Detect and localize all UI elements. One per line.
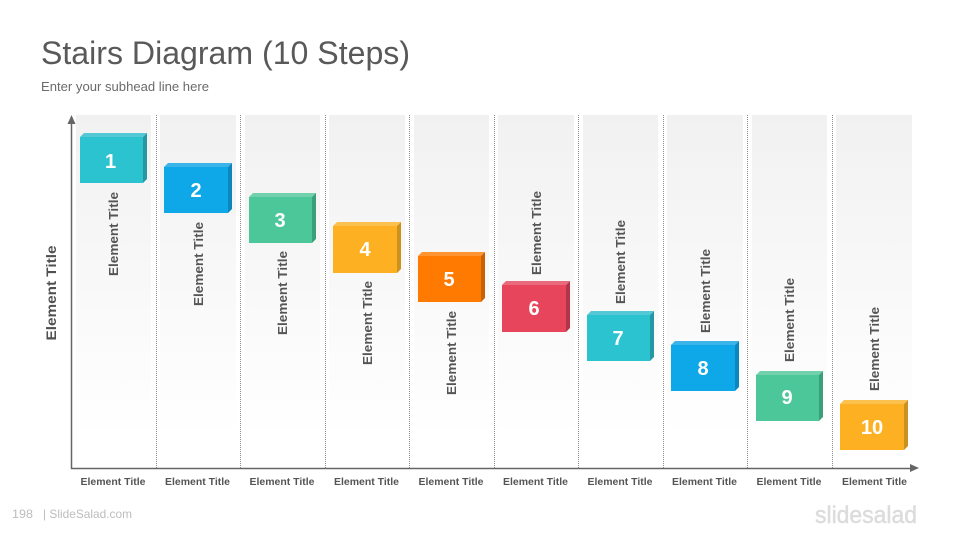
step 2 (164, 163, 232, 213)
step 9: 9 (781, 387, 793, 409)
step 4 vertical label: Element Title (361, 281, 375, 365)
step 7: 7 (612, 328, 624, 350)
step 2: 2 (190, 180, 202, 202)
x axis labels: Element Title (418, 476, 484, 488)
x axis labels: Element Title (842, 476, 907, 488)
column backgrounds (76, 115, 912, 465)
y axis arrow (68, 115, 76, 469)
x axis labels (80, 476, 907, 488)
x axis labels: Element Title (334, 476, 399, 488)
step 9 (756, 371, 823, 421)
step 2 vertical label: Element Title (192, 222, 206, 306)
x axis labels: Element Title (165, 476, 230, 488)
step 1 (80, 133, 147, 183)
logo wordmark: slidesalad (815, 502, 917, 529)
footer page number and site: 198 (12, 507, 33, 521)
step 3: 3 (274, 210, 286, 232)
step 8: 8 (697, 358, 709, 380)
step 10 (840, 400, 908, 450)
step 4 (333, 222, 401, 273)
step 3 (249, 193, 316, 243)
step 10 vertical label: Element Title (868, 307, 882, 391)
step 7 (587, 311, 654, 361)
subhead: Enter your subhead line here (41, 80, 209, 94)
step 5: 5 (443, 269, 455, 291)
step 5 vertical label: Element Title (445, 311, 459, 395)
title: Stairs Diagram (10 Steps) (41, 35, 410, 71)
step 9 vertical label: Element Title (783, 278, 797, 362)
step 7 vertical label: Element Title (614, 220, 628, 304)
step 4: 4 (359, 239, 371, 261)
step 5 (418, 252, 485, 302)
x axis labels: Element Title (250, 476, 315, 488)
step 8 (671, 341, 739, 391)
x axis labels: Element Title (588, 476, 653, 488)
x axis labels: Element Title (756, 476, 822, 488)
step 6: 6 (528, 298, 540, 320)
step 1: 1 (105, 151, 116, 173)
step 8 vertical label: Element Title (699, 249, 713, 333)
x axis arrow (71, 464, 919, 472)
step 10: 10 (861, 417, 883, 439)
x axis labels: Element Title (672, 476, 737, 488)
x axis labels: Element Title (503, 476, 568, 488)
step 1 vertical label: Element Title (107, 192, 121, 276)
footer page number and site: | SlideSalad.com (43, 507, 132, 521)
step 3 vertical label: Element Title (276, 251, 290, 335)
y axis title: Element Title (43, 245, 59, 341)
x axis labels: Element Title (80, 476, 146, 488)
step 6 (502, 281, 570, 332)
step 6 vertical label: Element Title (530, 191, 544, 275)
